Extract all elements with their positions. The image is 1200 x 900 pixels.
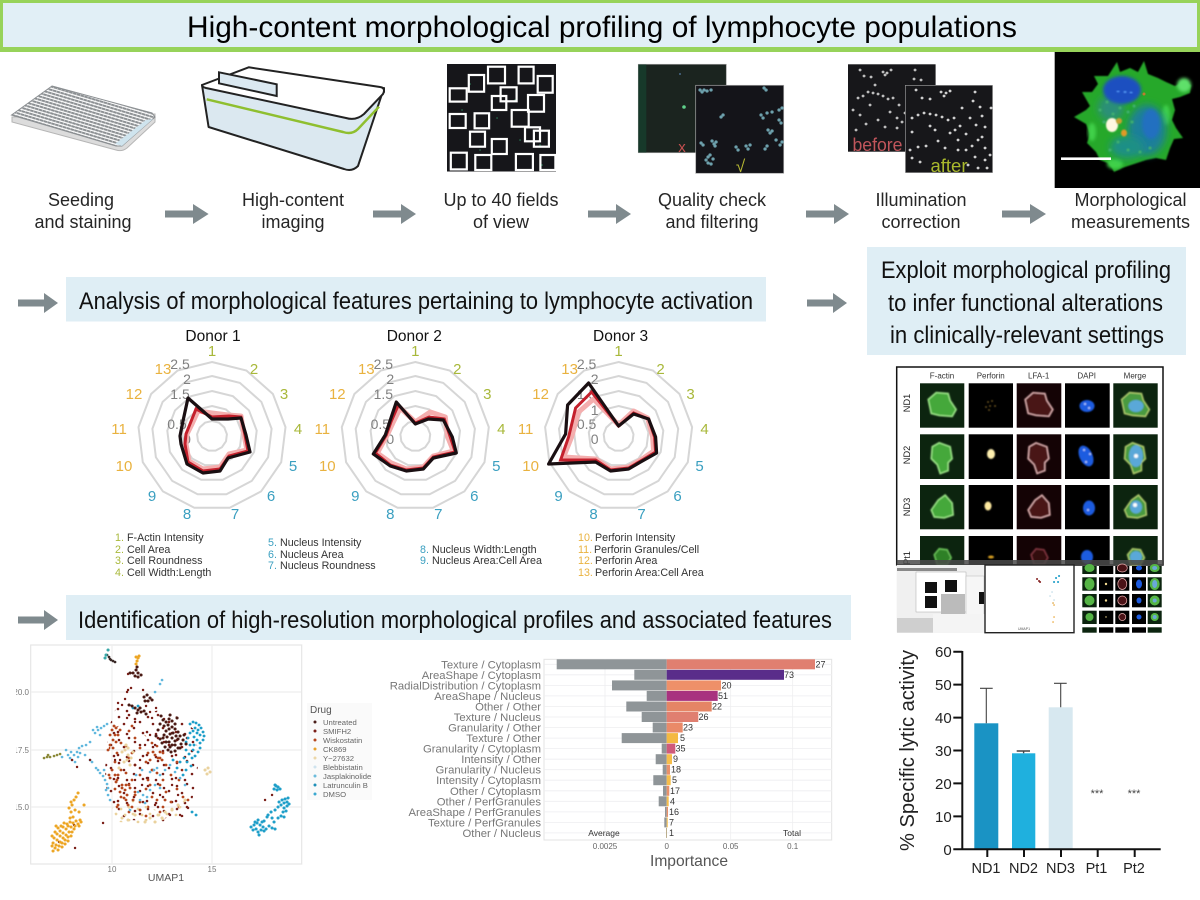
radar legend: nucleus features: Nucleus Intensity bbox=[280, 537, 362, 549]
F-actin cells bbox=[928, 392, 956, 565]
radar chart: donor 3: 2 bbox=[656, 361, 665, 378]
bar category labels: Granularity / Nucleus bbox=[436, 765, 541, 777]
step label: illumination correction: correction bbox=[881, 212, 961, 232]
icon: stained cell micrograph bbox=[1055, 52, 1200, 188]
radar chart: donor 1: 11 bbox=[111, 421, 127, 438]
radar chart: donor 1: 2 bbox=[250, 361, 258, 378]
bar chart: feature importance: Total bbox=[783, 828, 801, 838]
radar legend: perforin features: 13. bbox=[578, 567, 593, 579]
radar legend: nucleus features: Nucleus Area bbox=[280, 549, 344, 561]
radar legend: nucleus features bbox=[268, 537, 376, 572]
bar value labels: 4 bbox=[670, 796, 675, 806]
bar category labels: Other / PerfGranules bbox=[437, 796, 541, 808]
radar chart: donor 3: 7 bbox=[637, 506, 646, 523]
icon: fields of view bbox=[447, 64, 556, 173]
radar chart: donor 1: 8 bbox=[183, 506, 191, 523]
bar category labels: Other / Cytoplasm bbox=[450, 786, 541, 798]
radar chart: donor 3: 1 bbox=[614, 343, 623, 360]
step label: morphological measurements: Morphological bbox=[1074, 190, 1187, 210]
step label: fields of view bbox=[443, 190, 559, 232]
bar chart: specific lytic activity: 0 bbox=[943, 842, 952, 859]
bar chart: specific lytic activity: 10 bbox=[935, 809, 952, 826]
radar legend: nucleus ratios: Nucleus Width:Length bbox=[432, 544, 537, 556]
scatter legend: drugs: DMSO bbox=[323, 790, 346, 799]
scatter legend: drugs: Blebbistatin bbox=[323, 763, 363, 772]
radar chart: donor 2: 9 bbox=[351, 488, 359, 505]
bar chart: feature importance: 0 bbox=[664, 842, 669, 851]
radar legend: perforin features: Perforin Intensity bbox=[595, 532, 676, 544]
step label: high-content imaging bbox=[242, 190, 344, 232]
title banner bbox=[0, 0, 1200, 52]
scatter legend: drugs: Y−27632 bbox=[323, 754, 354, 763]
radar chart: donor 3: 1.5 bbox=[577, 386, 597, 402]
bar chart: feature importance: Average bbox=[588, 828, 620, 838]
radar chart: donor 2: 0 bbox=[386, 431, 394, 447]
bar category labels bbox=[390, 659, 541, 840]
bar chart: specific lytic activity: Pt2 bbox=[1123, 861, 1145, 877]
step label: seeding and staining bbox=[34, 190, 132, 232]
radar chart: donor 2: 3 bbox=[483, 386, 491, 403]
radar chart: donor 2: 13 bbox=[358, 361, 375, 378]
radar legend: nucleus features: 7. bbox=[268, 560, 277, 572]
radar chart: donor 3: 1 bbox=[591, 402, 599, 418]
bar category labels: Intensity / Cytoplasm bbox=[436, 775, 541, 787]
bar chart: specific lytic activity: 40 bbox=[935, 710, 952, 727]
microscopy panel: stained donor cells: Perforin bbox=[977, 372, 1005, 380]
radar legend: nucleus ratios: Nucleus Area:Cell Area bbox=[432, 555, 542, 567]
radar legend: cell features: 2. bbox=[115, 544, 124, 556]
radar chart: donor 3: 4 bbox=[700, 421, 709, 438]
radar chart: donor 2: 0.5 bbox=[371, 416, 390, 432]
scatter plot: UMAP bbox=[13, 645, 302, 884]
bar value labels: 26 bbox=[698, 712, 709, 722]
radar chart: donor 1: 2.5 bbox=[170, 356, 190, 372]
bars: total importance bbox=[667, 659, 815, 838]
arrow: to clinical heading bbox=[807, 293, 847, 313]
radar legend: nucleus ratios: 9. bbox=[420, 555, 429, 567]
radar chart: donor 3: 2.5 bbox=[577, 356, 597, 372]
icon: quality check panels: √ bbox=[736, 157, 746, 176]
microscopy panel: stained donor cells bbox=[897, 367, 1163, 565]
radar chart: donor 3: 2 bbox=[591, 371, 599, 387]
bar value labels: 17 bbox=[670, 786, 680, 796]
bar category labels: Texture / Cytoplasm bbox=[441, 659, 541, 671]
bar value labels: 51 bbox=[718, 691, 728, 701]
bar chart: specific lytic activity: 30 bbox=[935, 743, 952, 760]
radar chart: donor 3: 6 bbox=[673, 488, 682, 505]
scatter legend: drugs: Wiskostatin bbox=[323, 736, 362, 745]
bar category labels: Other / Other bbox=[475, 702, 541, 714]
step label: fields of view: of view bbox=[473, 212, 530, 232]
bar value labels: 7 bbox=[669, 818, 674, 828]
LFA-1 cells bbox=[1025, 392, 1053, 565]
thumbnail: UMAP mini plot bbox=[985, 565, 1074, 633]
step label: high-content imaging: High-content bbox=[242, 190, 344, 210]
icon: seeding plate bbox=[12, 86, 155, 151]
microscopy panel: stained donor cells: ND3 bbox=[902, 498, 912, 516]
radar chart: donor 3: 3 bbox=[686, 386, 695, 403]
arrow: step 2 to 3 bbox=[373, 204, 416, 224]
bar chart: specific lytic activity: ND2 bbox=[1009, 861, 1038, 877]
radar chart: donor 1: 3 bbox=[280, 386, 288, 403]
arrow: to identification heading bbox=[18, 610, 58, 630]
icon: quality check panels: x bbox=[678, 139, 686, 156]
scatter plot: UMAP: 17.5 bbox=[13, 746, 30, 755]
step label: seeding and staining: and staining bbox=[34, 212, 132, 232]
scatter legend: drugs: SMIFH2 bbox=[323, 727, 351, 736]
bar chart: specific lytic activity: ND3 bbox=[1046, 861, 1075, 877]
bar category labels: AreaShape / Nucleus bbox=[434, 691, 541, 703]
scatter plot: UMAP: 20.0 bbox=[13, 688, 30, 697]
radar chart: donor 3: 0 bbox=[591, 431, 599, 447]
bar chart: feature importance: 0.0025 bbox=[593, 842, 618, 851]
icon: quality check panels bbox=[638, 64, 784, 176]
scatter legend: drugs: Jasplakinolide bbox=[323, 772, 371, 781]
bar category labels: Granularity / Cytoplasm bbox=[423, 744, 541, 756]
merged cells bbox=[1122, 392, 1150, 565]
radar chart: donor 2: 12 bbox=[329, 386, 346, 403]
radar chart: donor 2: 7 bbox=[434, 506, 442, 523]
bar category labels: Other / Nucleus bbox=[463, 828, 541, 840]
heading: analysis of morphological features bbox=[66, 277, 766, 322]
radar legend: nucleus features: 5. bbox=[268, 537, 277, 549]
radar chart: donor 2: Donor 2 bbox=[387, 328, 442, 345]
radar legend: cell features: Cell Width:Length bbox=[127, 567, 211, 579]
heading: exploit morphological profiling: Exploit morphological profiling bbox=[881, 257, 1171, 284]
heading: identification of profiles: Identification of high-resolution morphological profiles and associated features bbox=[78, 607, 832, 634]
radar chart: donor 2: 1.5 bbox=[374, 386, 393, 402]
scatter legend: drugs: Drug bbox=[310, 705, 332, 716]
scatter legend: drugs bbox=[307, 703, 372, 800]
bar value labels: 73 bbox=[784, 670, 794, 680]
step label: quality check: Quality check bbox=[658, 190, 767, 210]
step label: quality check: and filtering bbox=[665, 212, 759, 232]
radar chart: donor 1: 1.5 bbox=[170, 386, 190, 402]
radar chart: donor 1: 12 bbox=[126, 386, 142, 403]
radar legend: cell features: 3. bbox=[115, 555, 124, 567]
bar chart: specific lytic activity bbox=[897, 644, 1161, 877]
bar value labels: 27 bbox=[816, 660, 826, 670]
radar chart: donor 3: 11 bbox=[518, 421, 533, 438]
microscopy panel: stained donor cells: Pt1 bbox=[902, 551, 912, 565]
radar legend: perforin features bbox=[578, 532, 704, 579]
icon: illumination correction panels bbox=[848, 64, 993, 176]
bar value labels: 18 bbox=[671, 764, 681, 774]
radar legend: cell features bbox=[115, 532, 211, 579]
scatter plot: UMAP: 15 bbox=[208, 865, 217, 874]
radar chart: donor 2: 6 bbox=[470, 488, 478, 505]
radar legend: cell features: Cell Roundness bbox=[127, 555, 202, 567]
radar chart: donor 1: Donor 1 bbox=[185, 328, 241, 345]
step label: morphological measurements: measurements bbox=[1071, 212, 1190, 232]
thumbnail: software screenshots bbox=[897, 565, 985, 633]
bar value labels: 23 bbox=[683, 722, 693, 732]
bar chart: specific lytic activity: % Specific lytic activity bbox=[897, 650, 919, 851]
perforin granules bbox=[984, 401, 995, 558]
step label: illumination correction bbox=[875, 190, 967, 232]
radar chart: donor 1: 6 bbox=[267, 488, 275, 505]
bar value labels: 35 bbox=[676, 744, 686, 754]
heading: identification of profiles bbox=[66, 595, 851, 640]
radar chart: donor 1: 13 bbox=[155, 361, 171, 378]
radar chart: donor 2: 2 bbox=[386, 371, 394, 387]
arrow: step 5 to 6 bbox=[1002, 204, 1046, 224]
radar chart: donor 1 bbox=[111, 328, 302, 523]
radar legend: perforin features: 12. bbox=[578, 555, 593, 567]
radar legend: perforin features: Perforin Area bbox=[595, 555, 657, 567]
scatter plot: UMAP: UMAP1 bbox=[148, 872, 184, 884]
step label: seeding and staining: Seeding bbox=[48, 190, 114, 210]
bar chart: specific lytic activity: 60 bbox=[935, 644, 952, 661]
bar chart: specific lytic activity: 50 bbox=[935, 677, 952, 694]
bar value labels: 16 bbox=[669, 807, 679, 817]
radar chart: donor 1: 0.5 bbox=[167, 416, 187, 432]
heading: exploit morphological profiling bbox=[867, 247, 1186, 355]
DAPI nuclei bbox=[1075, 400, 1097, 564]
bar value labels bbox=[669, 660, 826, 838]
bar value labels: 20 bbox=[722, 680, 732, 690]
bar chart: specific lytic activity: ND1 bbox=[971, 861, 1001, 877]
bar chart: specific lytic activity: 20 bbox=[935, 776, 952, 793]
bar category labels: Granularity / Other bbox=[448, 722, 541, 734]
radar legend: cell features: 1. bbox=[115, 532, 124, 544]
radar chart: donor 1: 5 bbox=[289, 458, 297, 475]
radar chart: donor 2 bbox=[315, 328, 505, 523]
scatter plot: UMAP: 10 bbox=[108, 865, 117, 874]
radar legend: perforin features: 10. bbox=[578, 532, 593, 544]
radar chart: donor 3: 9 bbox=[554, 488, 563, 505]
radar chart: donor 1: 9 bbox=[148, 488, 156, 505]
radar chart: donor 2: 10 bbox=[319, 458, 336, 475]
title banner: High-content morphological profiling of lymphocyte populations bbox=[187, 11, 1017, 44]
radar legend: nucleus ratios: 8. bbox=[420, 544, 429, 556]
radar chart: donor 3: 12 bbox=[532, 386, 549, 403]
bar value labels: 5 bbox=[680, 733, 685, 743]
radar chart: donor 1: 7 bbox=[231, 506, 239, 523]
bar chart: specific lytic activity: Pt1 bbox=[1086, 861, 1107, 877]
radar chart: donor 1: 0 bbox=[183, 431, 191, 447]
radar legend: nucleus features: Nucleus Roundness bbox=[280, 560, 376, 572]
microscopy panel: stained donor cells: DAPI bbox=[1077, 372, 1096, 380]
radar chart: donor 3: 5 bbox=[695, 458, 704, 475]
radar legend: perforin features: Perforin Granules/Cell bbox=[594, 544, 699, 556]
microscopy panel: stained donor cells: ND1 bbox=[902, 394, 912, 412]
icon: illumination correction panels: after bbox=[930, 155, 968, 176]
bar category labels: Texture / Other bbox=[466, 733, 541, 745]
bar value labels: 9 bbox=[673, 754, 678, 764]
arrow: to analysis heading bbox=[18, 293, 58, 313]
radar chart: donor 3: Donor 3 bbox=[593, 328, 648, 345]
radar chart: donor 2: 4 bbox=[497, 421, 505, 438]
radar chart: donor 1: 10 bbox=[116, 458, 132, 475]
radar chart: donor 3: 13 bbox=[561, 361, 578, 378]
step label: morphological measurements bbox=[1071, 190, 1190, 232]
bar category labels: AreaShape / PerfGranules bbox=[408, 807, 541, 819]
thumbnail: UMAP mini plot: UMAP1 bbox=[1018, 627, 1030, 631]
bar category labels: Texture / Nucleus bbox=[454, 712, 541, 724]
radar chart: donor 3: 0.5 bbox=[577, 416, 597, 432]
microscopy panel: stained donor cells: Merge bbox=[1124, 372, 1147, 380]
radar legend: perforin features: 11. bbox=[578, 544, 592, 556]
microscopy panel: stained donor cells: LFA-1 bbox=[1028, 372, 1050, 380]
radar legend: perforin features: Perforin Area:Cell Area bbox=[595, 567, 704, 579]
bar value labels: 22 bbox=[712, 702, 722, 712]
radar chart: donor 3: 10 bbox=[522, 458, 539, 475]
radar chart: donor 2: 11 bbox=[315, 421, 330, 438]
radar chart: donor 3 bbox=[518, 328, 709, 523]
radar legend: cell features: Cell Area bbox=[127, 544, 170, 556]
heading: exploit morphological profiling: in clinically-relevant settings bbox=[890, 322, 1164, 349]
thumbnail: cell grid bbox=[1082, 564, 1162, 633]
bar category labels: RadialDistribution / Cytoplasm bbox=[390, 680, 541, 692]
bars: average importance bbox=[557, 659, 667, 838]
microscopy panel: stained donor cells: ND2 bbox=[902, 446, 912, 464]
radar chart: donor 2: 8 bbox=[386, 506, 394, 523]
radar chart: donor 2: 2.5 bbox=[374, 356, 393, 372]
radar legend: nucleus ratios bbox=[420, 544, 542, 567]
bar chart: feature importance: 0.05 bbox=[723, 842, 739, 851]
radar chart: donor 1: 1 bbox=[208, 343, 216, 360]
bar chart: specific lytic activity: *** bbox=[1128, 788, 1141, 800]
bar category labels: Intensity / Other bbox=[461, 754, 541, 766]
radar chart: donor 1: 2 bbox=[183, 371, 191, 387]
bar category labels: AreaShape / Cytoplasm bbox=[422, 670, 541, 682]
scatter plot: UMAP: 15.0 bbox=[13, 803, 30, 812]
icon: illumination correction panels: before bbox=[852, 134, 902, 155]
radar legend: nucleus features: 6. bbox=[268, 549, 277, 561]
bar category labels: Texture / PerfGranules bbox=[428, 817, 541, 829]
bar value labels: 1 bbox=[669, 828, 674, 838]
radar legend: cell features: F-Actin Intensity bbox=[127, 532, 204, 544]
step label: fields of view: Up to 40 fields bbox=[443, 190, 559, 210]
radar chart: donor 2: 1 bbox=[411, 343, 419, 360]
radar legend: cell features: 4. bbox=[115, 567, 124, 579]
bar chart: specific lytic activity: *** bbox=[1091, 788, 1104, 800]
arrow: step 1 to 2 bbox=[165, 204, 209, 224]
bar chart: feature importance bbox=[390, 659, 832, 870]
image tiles background bbox=[920, 383, 1158, 565]
scatter legend: drugs: CK869 bbox=[323, 745, 347, 754]
step label: high-content imaging: imaging bbox=[261, 212, 325, 232]
arrow: step 4 to 5 bbox=[806, 204, 849, 224]
microscopy panel: stained donor cells: F-actin bbox=[930, 372, 954, 380]
bar chart: feature importance: Importance bbox=[650, 853, 728, 870]
heading: analysis of morphological features: Analysis of morphological features pertaining to lymphocyte activation bbox=[79, 288, 753, 315]
step label: illumination correction: Illumination bbox=[875, 190, 967, 210]
scatter legend: drugs: Untreated bbox=[323, 718, 357, 727]
arrow: step 3 to 4 bbox=[588, 204, 631, 224]
bar value labels: 5 bbox=[672, 775, 677, 785]
scatter legend: drugs: Latrunculin B bbox=[323, 781, 368, 790]
step label: quality check bbox=[658, 190, 767, 232]
icon: imaging instrument bbox=[202, 67, 384, 170]
error bars bbox=[980, 683, 1067, 753]
radar chart: donor 2: 5 bbox=[492, 458, 500, 475]
radar chart: donor 3: 8 bbox=[589, 506, 598, 523]
bar chart: feature importance: 0.1 bbox=[787, 842, 799, 851]
axes bbox=[953, 651, 1161, 857]
bars bbox=[974, 707, 1073, 849]
radar chart: donor 1: 4 bbox=[294, 421, 302, 438]
radar chart: donor 2: 2 bbox=[453, 361, 461, 378]
heading: exploit morphological profiling: to infer functional alterations bbox=[888, 290, 1163, 317]
